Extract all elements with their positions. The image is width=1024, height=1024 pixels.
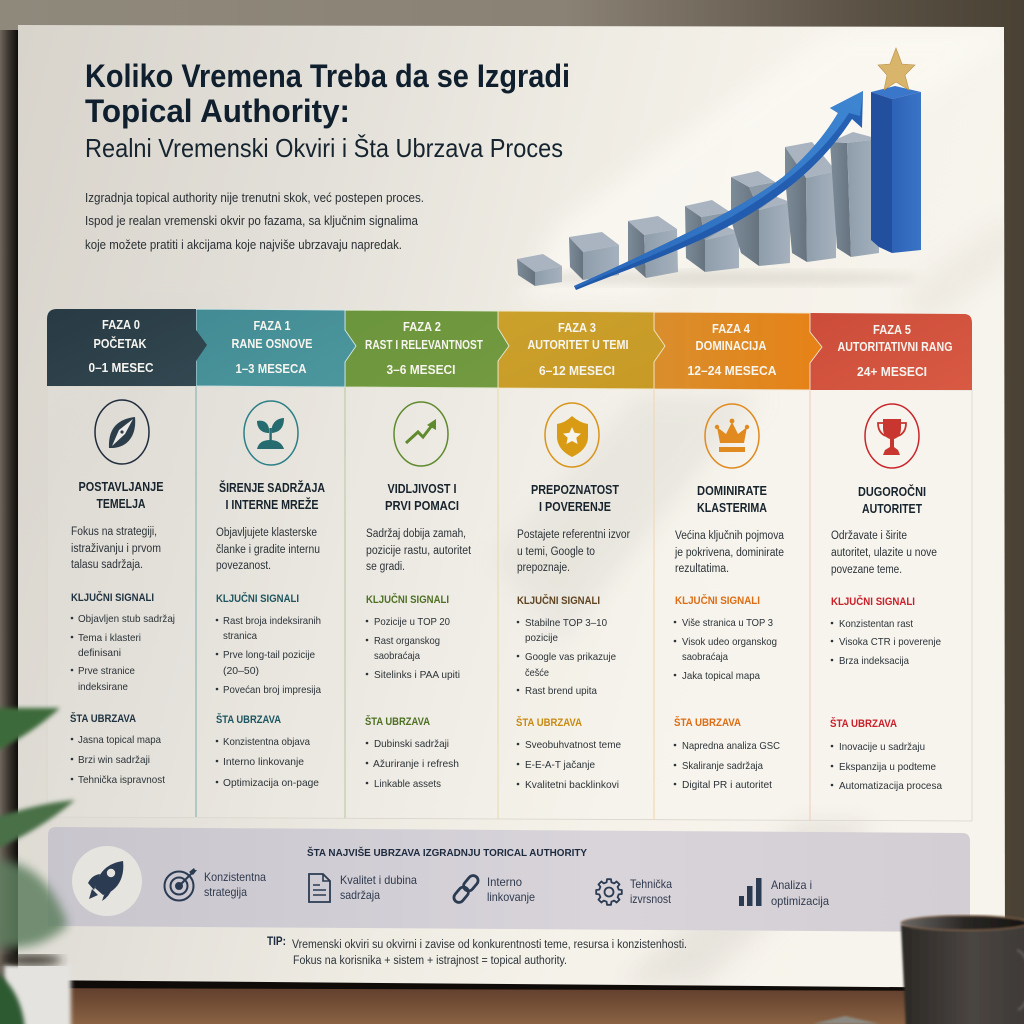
what speeds up: Automatizacija procesa <box>839 780 942 792</box>
heading <box>531 483 619 514</box>
heading: TEMELJA <box>96 497 146 511</box>
description: Objavljujete klasterske <box>216 527 317 539</box>
description: prepoznaje. <box>517 562 570 574</box>
item: technical excellence <box>596 877 672 906</box>
what speeds up: Konzistentna objava <box>223 736 310 748</box>
header: faza 0 <box>47 309 207 386</box>
key signals: KLJUČNI SIGNALI <box>831 595 915 608</box>
heading <box>78 480 164 511</box>
heading: POSTAVLJANJE <box>78 480 164 494</box>
header: faza 0: FAZA 0 <box>102 318 140 332</box>
header: faza 3: FAZA 3 <box>558 321 596 335</box>
icon: crown <box>705 404 759 468</box>
heading: DOMINIRATE <box>697 484 767 498</box>
description <box>517 529 630 574</box>
heading: PREPOZNATOST <box>531 483 619 497</box>
header: faza 0: POČETAK <box>94 336 146 351</box>
what speeds up: Napredna analiza GSC <box>682 740 780 752</box>
icon: sprout <box>244 401 298 465</box>
item: content quality: Kvalitet i dubina <box>340 873 417 887</box>
header: faza 4: 12–24 MESECA <box>688 364 776 378</box>
rising arrow <box>574 91 863 290</box>
key signals: KLJUČNI SIGNALI <box>366 593 449 606</box>
key signals: Povećan broj impresija <box>223 684 321 696</box>
key signals: Konzistentan rast <box>839 618 913 630</box>
header: faza 2: FAZA 2 <box>403 320 441 334</box>
key signals: Brza indeksacija <box>839 655 909 667</box>
key signals: Sitelinks i PAA upiti <box>374 669 460 681</box>
what speeds up: Brzi win sadržaji <box>78 754 150 766</box>
bar 4 <box>685 200 739 272</box>
title: Realni Vremenski Okviri i Šta Ubrzava Proces <box>85 133 563 163</box>
key signals: Visok udeo organskog <box>682 636 777 648</box>
blue bar <box>871 86 921 253</box>
key signals <box>366 593 460 681</box>
description: je pokrivena, dominirate <box>674 547 784 559</box>
key signals <box>517 594 616 697</box>
item: strategy: strategija <box>204 885 247 899</box>
what speeds up: ŠTA UBRZAVA <box>365 715 430 728</box>
3D growth chart <box>517 48 921 290</box>
what speeds up <box>516 716 621 791</box>
intro text: Ispod je realan vremenski okvir po fazama, sa ključnim signalima <box>85 214 418 228</box>
item: technical excellence: izvrsnost <box>630 892 672 906</box>
key signals: Google vas prikazuje <box>525 651 616 663</box>
icon: compass <box>95 400 149 464</box>
what speeds up: Sveobuhvatnost teme <box>525 739 621 751</box>
title: Topical Authority: <box>85 93 350 129</box>
description: povezanost. <box>216 560 271 572</box>
what speeds up: Tehnička ispravnost <box>78 774 165 786</box>
key signals: Jaka topical mapa <box>682 670 760 682</box>
key signals <box>216 592 321 696</box>
description: se gradi. <box>366 561 405 573</box>
bar 2 <box>569 232 619 280</box>
item: analysis: optimizacija <box>771 894 829 908</box>
key signals: Stabilne TOP 3–10 <box>525 617 607 629</box>
panel: what speeds up the most <box>48 827 970 932</box>
key signals: Rast brend upita <box>525 685 597 697</box>
what speeds up: Digital PR i autoritet <box>682 779 772 791</box>
heading: KLASTERIMA <box>697 501 767 515</box>
description: Postajete referentni izvor <box>517 529 630 541</box>
column: faza 3 <box>516 403 630 791</box>
table body outline <box>47 386 972 821</box>
item: internal linking <box>452 874 535 904</box>
column: faza 1 <box>216 401 325 789</box>
key signals: pozicije <box>525 632 558 644</box>
what speeds up <box>830 717 942 792</box>
plant <box>0 708 75 1024</box>
gold star <box>878 48 915 90</box>
key signals: Visoka CTR i poverenje <box>839 636 941 648</box>
what speeds up: Kvalitetni backlinkovi <box>525 779 619 791</box>
header: faza 0: 0–1 MESEC <box>88 361 154 375</box>
bar 1 <box>517 254 562 286</box>
what speeds up <box>674 716 780 791</box>
key signals: KLJUČNI SIGNALI <box>675 594 760 607</box>
bar 7 <box>830 132 879 257</box>
description <box>71 526 161 571</box>
header: faza 4: DOMINACIJA <box>696 339 766 353</box>
tip: Fokus na korisnika + sistem + istrajnost = topical authority. <box>293 955 567 967</box>
bar 3 <box>628 216 678 278</box>
item: internal linking: Interno <box>487 875 522 889</box>
key signals: Više stranica u TOP 3 <box>682 617 773 629</box>
intro text <box>85 191 424 252</box>
heading: AUTORITET <box>862 502 922 516</box>
heading: VIDLJIVOST I <box>388 482 456 496</box>
heading <box>385 482 459 513</box>
header: faza 2: RAST I RELEVANTNOST <box>365 338 483 352</box>
key signals: Objavljen stub sadržaj <box>78 613 175 625</box>
what speeds up: ŠTA UBRZAVA <box>70 712 136 725</box>
what speeds up: ŠTA UBRZAVA <box>830 717 897 730</box>
header: faza 5: 24+ MESECI <box>857 365 927 379</box>
key signals <box>71 591 175 693</box>
tip <box>267 936 687 967</box>
header: faza 1: RANE OSNOVE <box>232 337 312 351</box>
what speeds up: Ažuriranje i refresh <box>373 758 459 770</box>
what speeds up <box>70 712 165 786</box>
phase table <box>47 309 972 821</box>
item: technical excellence: Tehnička <box>630 877 672 891</box>
icon: rocket <box>72 846 142 916</box>
header: faza 2: 3–6 MESECI <box>386 363 456 377</box>
what speeds up: ŠTA UBRZAVA <box>516 716 582 729</box>
item: analysis <box>739 878 829 908</box>
description: talasu sadržaja. <box>71 559 143 571</box>
header: faza 1 <box>196 309 356 387</box>
description <box>216 527 320 572</box>
key signals: Rast broja indeksiranih <box>223 615 321 627</box>
header: faza 3: 6–12 MESECI <box>539 364 615 378</box>
board shadow on table <box>18 978 1005 991</box>
header: faza 4 <box>654 312 822 390</box>
key signals: Prve stranice <box>78 665 135 677</box>
bar 6 <box>785 142 836 262</box>
description: Održavate i širite <box>831 530 907 542</box>
header: faza 1: 1–3 MESECA <box>236 362 306 376</box>
what speeds up: Ekspanzija u podteme <box>839 761 936 773</box>
header: faza 3: AUTORITET U TEMI <box>528 338 628 352</box>
description: povezane teme. <box>831 564 902 576</box>
item: analysis: Analiza i <box>771 878 812 892</box>
description: pozicije rastu, autoritet <box>366 545 472 557</box>
description: u temi, Google to <box>517 546 595 558</box>
key signals: Tema i klasteri <box>78 632 141 644</box>
intro text: koje možete pratiti i akcijama koje najviše ubrzavaju napredak. <box>85 238 402 252</box>
description <box>674 530 785 575</box>
key signals <box>674 594 777 682</box>
heading <box>219 480 325 512</box>
key signals: Prve long-tail pozicije <box>223 649 315 661</box>
title: Koliko Vremena Treba da se Izgradi <box>85 58 570 94</box>
header: faza 2 <box>345 310 509 388</box>
description <box>831 530 937 576</box>
description: Većina ključnih pojmova <box>675 530 785 542</box>
what speeds up: Skaliranje sadržaja <box>682 760 763 772</box>
item: internal linking: linkovanje <box>487 890 535 904</box>
header: faza 5: FAZA 5 <box>873 323 911 337</box>
item: content quality: sadržaja <box>340 888 380 902</box>
what speeds up: ŠTA UBRZAVA <box>674 716 741 729</box>
icon: trophy <box>865 404 919 468</box>
description <box>366 528 472 573</box>
what speeds up: E-E-A-T jačanje <box>525 759 595 771</box>
what speeds up: Optimizacija on-page <box>223 777 319 789</box>
key signals: češće <box>525 667 549 679</box>
heading: I POVERENJE <box>539 500 611 514</box>
what speeds up <box>365 715 459 790</box>
tip: Vremenski okviri su okvirni i zavise od konkurentnosti teme, resursa i konzistenhosti. <box>292 939 687 951</box>
header: faza 5 <box>810 313 972 390</box>
description: istraživanju i prvom <box>71 543 161 555</box>
left wall shadow <box>0 30 18 990</box>
intro text: Izgradnja topical authority nije trenutni skok, već postepen proces. <box>85 191 424 205</box>
bar 5 <box>731 171 790 266</box>
description: članke i gradite internu <box>216 544 320 556</box>
header: faza 1: FAZA 1 <box>254 319 291 333</box>
what speeds up <box>216 713 319 789</box>
column: faza 4 <box>674 404 785 791</box>
heading: I INTERNE MREŽE <box>226 497 318 512</box>
key signals: KLJUČNI SIGNALI <box>71 591 154 604</box>
header: faza 4: FAZA 4 <box>712 322 750 336</box>
what speeds up: Dubinski sadržaji <box>374 738 449 750</box>
item: strategy <box>164 868 266 900</box>
coffee mug <box>901 916 1024 1024</box>
key signals: saobraćaja <box>682 651 728 663</box>
icon: growth line <box>394 402 448 466</box>
description: Fokus na strategiji, <box>71 526 157 538</box>
key signals: saobraćaja <box>374 650 420 662</box>
what speeds up: Linkable assets <box>374 778 441 790</box>
header: faza 5: AUTORITATIVNI RANG <box>838 340 952 354</box>
key signals: KLJUČNI SIGNALI <box>517 594 600 607</box>
column: faza 5 <box>830 404 942 792</box>
what speeds up: ŠTA UBRZAVA <box>216 713 281 726</box>
key signals: definisani <box>78 647 121 659</box>
key signals: Pozicije u TOP 20 <box>374 616 450 628</box>
heading <box>858 484 926 516</box>
what speeds up: Inovacije u sadržaju <box>839 741 925 753</box>
panel heading: ŠTA NAJVIŠE UBRZAVA IZGRADNJU TORICAL AUTHORITY <box>307 846 587 859</box>
key signals: Rast organskog <box>374 635 440 647</box>
column dividers <box>196 386 810 821</box>
wooden table <box>0 984 1024 1024</box>
key signals: (20–50) <box>223 665 259 677</box>
column: faza 0 <box>70 400 175 786</box>
key signals <box>831 595 941 667</box>
key signals: KLJUČNI SIGNALI <box>216 592 299 605</box>
key signals: indeksirane <box>78 681 128 693</box>
item: strategy: Konzistentna <box>204 870 266 884</box>
heading: DUGOROČNI <box>858 484 926 499</box>
description: rezultatima. <box>675 563 729 575</box>
title <box>85 58 570 163</box>
column: faza 2 <box>365 402 472 790</box>
description: Sadržaj dobija zamah, <box>366 528 466 540</box>
heading: PRVI POMACI <box>385 499 459 513</box>
header: faza 3 <box>498 311 665 389</box>
what speeds up: Interno linkovanje <box>223 756 304 768</box>
coaster on table <box>813 1016 880 1024</box>
key signals: stranica <box>223 630 257 642</box>
icon: shield <box>545 403 599 467</box>
what speeds up: Jasna topical mapa <box>78 734 161 746</box>
tip: TIP: <box>267 936 286 948</box>
heading: ŠIRENJE SADRŽAJA <box>219 480 325 495</box>
description: autoritet, ulazite u nove <box>831 547 937 559</box>
heading <box>697 484 767 515</box>
item: content quality <box>309 873 417 902</box>
